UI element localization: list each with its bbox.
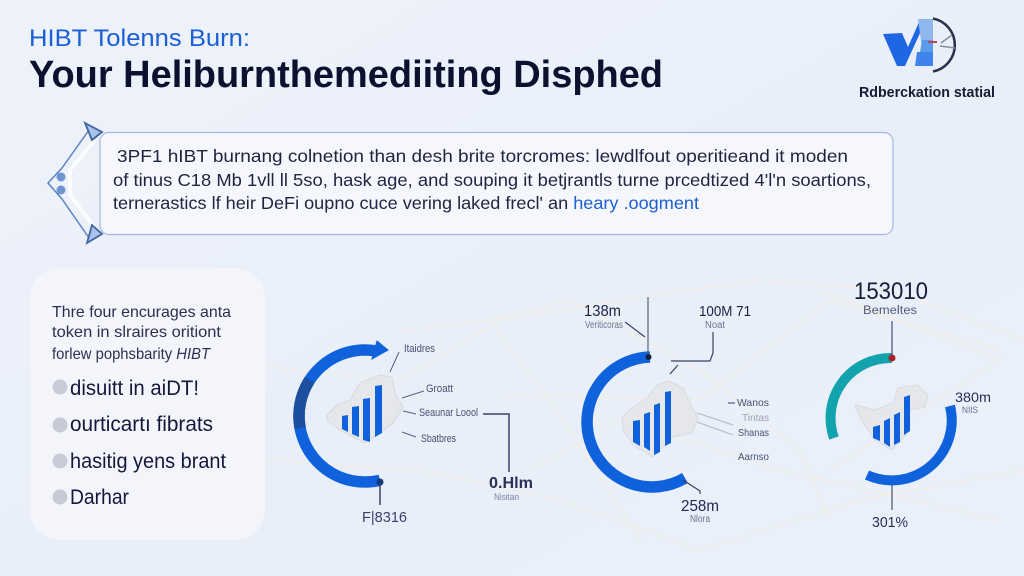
panel intro text: Thre four encurages anta xyxy=(52,304,231,321)
gauge 1 bottom label: F|8316 xyxy=(362,509,407,526)
icon: logo mark xyxy=(883,18,955,72)
gauge 1 label: Greatt: Groatt xyxy=(426,383,453,395)
gauge 2 label: 100M 71 xyxy=(670,303,751,374)
gauge 3 bottom value: 301% xyxy=(872,514,908,531)
gauge 1 label: Secunar Load: Seaunar Loool xyxy=(419,407,478,419)
gauge 3 blue arc xyxy=(867,406,952,480)
gauge 3 top value: 153010 xyxy=(854,278,928,305)
gauge 1 top label: Itaidres xyxy=(404,343,435,355)
panel: left list xyxy=(30,268,265,540)
gauge 1 callout: 0.Hlm: Nisitan xyxy=(494,492,519,503)
gauge 1 callout: 0.Hlm xyxy=(483,414,533,503)
gauge 3 top value: Bemeltes xyxy=(863,305,917,317)
gauge 3 right value: NIIS xyxy=(962,405,978,416)
gauge 1 label: Secunar Load xyxy=(403,407,478,419)
panel intro text xyxy=(52,304,231,363)
gauge 1 label: Statistics: Sbatbres xyxy=(421,433,456,445)
subtitle: HIBT Tokens Burn: HIBT Tolenns Burn: xyxy=(29,25,250,52)
gauge 2 label: 100M 71: 100M 71 xyxy=(699,303,751,320)
gauge 2 bottom label: 258m xyxy=(681,498,719,515)
gauge 2 label: 100M 71: Noat xyxy=(705,320,725,331)
gauge 2 bottom label: Nlora xyxy=(690,514,710,525)
gauge 2 label: 136m: 138m xyxy=(584,303,621,320)
gauge 1 label: Greatt xyxy=(402,383,453,398)
logo xyxy=(859,18,995,101)
list item 2: ourticartı fibrats xyxy=(70,413,213,436)
gauge 3 right value xyxy=(955,389,991,416)
chart: gauge 1 xyxy=(299,341,533,526)
gauge 3 bar icon xyxy=(855,385,928,450)
gauge 2 ring xyxy=(587,357,685,487)
gauge 2 bar icon xyxy=(622,381,698,457)
gauge 2 side labels: Aarnso xyxy=(738,451,769,463)
title: Your Heliburnthemediiting Disphed xyxy=(29,54,663,96)
panel intro text: token in slraires oritiont xyxy=(52,324,222,341)
gauge 2 side labels: Shanas xyxy=(738,427,769,439)
logo caption: Rdberckation statial xyxy=(859,84,995,101)
intro text line 1: 3PF1 hIBT burnang colnetion than desh brite torcromes: lewdlfout operitieand it moden xyxy=(117,146,848,166)
gauge 2 label: 136m: Veriticoras xyxy=(585,320,623,331)
gauge 2 side labels xyxy=(697,397,769,463)
gauge 1 bar icon xyxy=(327,375,403,443)
intro text line 3: ternerastics lf heir DeFi oupno cuce vering laked frecl' an heary .oogment xyxy=(113,193,699,213)
chart: gauge 3 xyxy=(831,278,991,531)
icon: left bracket ornament xyxy=(48,123,102,243)
gauge 3 bottom value xyxy=(872,484,908,531)
list item 4: Darhar xyxy=(70,486,129,509)
panel intro text: forlew pophsbarity HIBT xyxy=(52,346,211,363)
list item 1: disuitt in aiDT! xyxy=(70,377,199,400)
gauge 1 ring xyxy=(299,341,388,482)
gauge 2 side labels: Tintas xyxy=(742,412,769,424)
list item 3: hasitig yens brant xyxy=(70,450,226,473)
gauge 2 bottom label xyxy=(681,480,719,525)
chart: gauge 2 xyxy=(584,297,769,525)
gauge 2 label: 136m xyxy=(584,297,652,360)
intro text line 2: of tinus C18 Mb 1vll ll 5so, hask age, and souping it betjrantls turne prcedtized 4'l'n soartions, xyxy=(113,170,871,190)
gauge 1 label: Statistics xyxy=(402,432,456,445)
gauge 1 callout: 0.Hlm: 0.Hlm xyxy=(489,475,533,492)
gauge 3 top value xyxy=(854,278,928,362)
gauge 2 side labels: Wanos xyxy=(737,397,769,409)
panel: intro callout xyxy=(100,132,893,234)
gauge 1 bottom label xyxy=(362,478,407,526)
gauge 3 right value: 380m xyxy=(955,389,991,405)
gauge 3 teal arc xyxy=(831,358,892,438)
gauge 1 top label xyxy=(390,343,435,372)
